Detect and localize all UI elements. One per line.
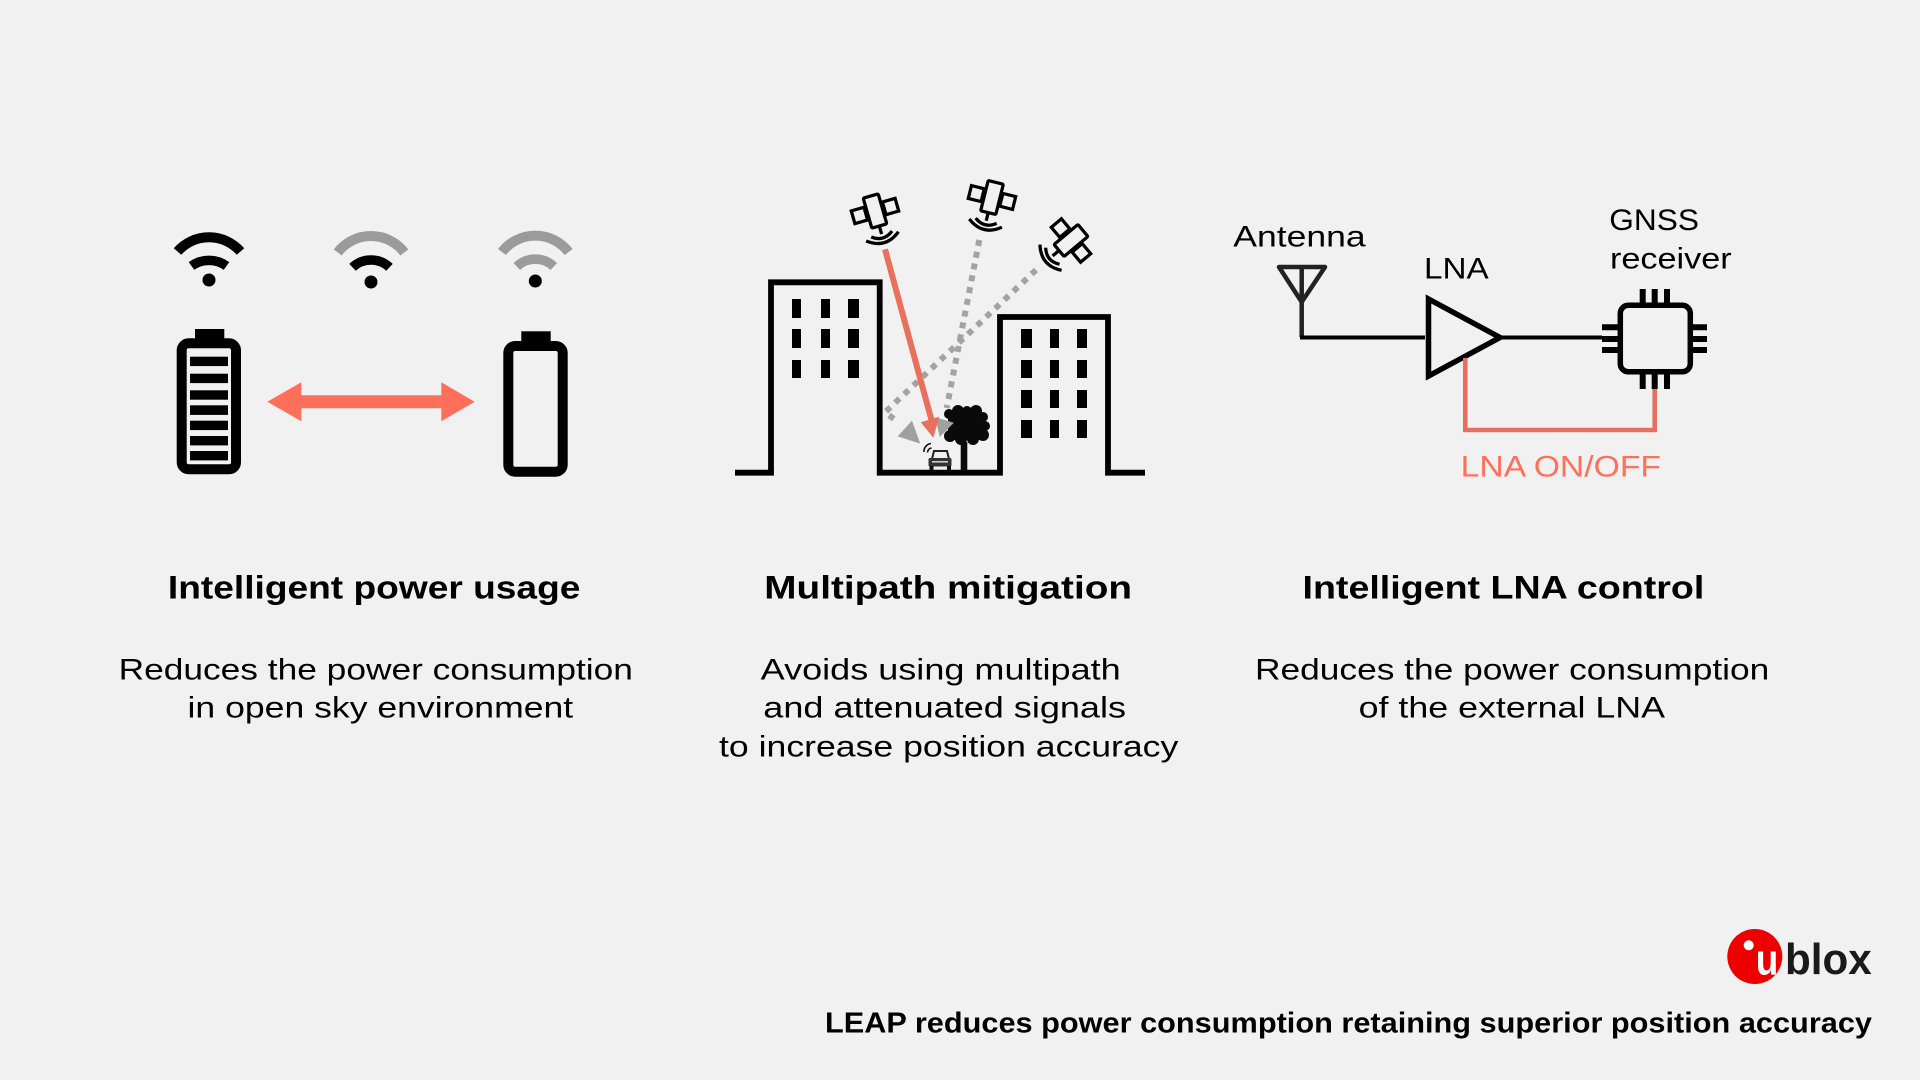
label: GNSS receiver	[1609, 204, 1732, 275]
icon: satellite right	[1031, 213, 1098, 279]
icon: low signal wifi	[502, 236, 569, 288]
text block: multipath description: Avoids using multipath	[761, 653, 1121, 686]
arrowhead: direct signal	[921, 417, 939, 438]
text block: multipath description: to increase position accuracy	[719, 731, 1178, 764]
logo: u-blox	[1727, 929, 1872, 984]
icon: empty battery	[508, 331, 563, 472]
heading: multipath mitigation: Multipath mitigation	[764, 569, 1132, 605]
text block: power usage description: Reduces the power consumption	[119, 653, 633, 686]
text block: LNA description: Reduces the power consumption	[1255, 653, 1769, 686]
footer caption: LEAP reduces power consumption retaining superior position accuracy	[825, 1007, 1872, 1039]
text block: multipath description	[719, 653, 1178, 764]
red control line	[1465, 358, 1655, 430]
text block: power usage description	[119, 653, 633, 724]
panel: intelligent LNA control	[1233, 204, 1769, 724]
icon: car with receiver	[924, 444, 952, 470]
signal wires	[1300, 336, 1602, 340]
icon: amplifier triangle	[1428, 299, 1500, 376]
label: LNA ON/OFF: LNA ON/OFF	[1461, 451, 1661, 484]
left building windows	[792, 299, 859, 378]
arrowhead: multipath signal	[899, 422, 919, 442]
text block: power usage description: in open sky environment	[188, 691, 574, 724]
icon: full battery	[182, 329, 236, 469]
text block: multipath description: and attenuated signals	[763, 691, 1126, 724]
text block: LNA description: of the external LNA	[1359, 691, 1665, 724]
red direct signal line	[885, 249, 933, 427]
text block: LNA description	[1255, 653, 1769, 724]
buildings outline	[735, 282, 1145, 473]
icon: satellite left	[849, 190, 906, 249]
icon: GNSS receiver chip	[1602, 289, 1707, 389]
right building windows	[1021, 329, 1087, 438]
label: GNSS receiver: GNSS	[1609, 204, 1699, 237]
icon: tree	[944, 405, 990, 471]
icon: full signal wifi	[178, 237, 240, 286]
arrow: double-headed coral	[267, 382, 475, 421]
icon: satellite centre	[962, 177, 1018, 235]
label: antenna: Antenna	[1233, 221, 1366, 254]
icon: antenna symbol	[1279, 267, 1325, 337]
dotted line: attenuated signal	[947, 240, 979, 408]
arrowhead: attenuated signal	[936, 418, 953, 436]
icon: medium signal wifi	[338, 236, 404, 288]
dotted line: reflected multipath signal	[885, 270, 1036, 422]
label: LNA: LNA	[1424, 253, 1489, 286]
logo: u-blox: blox	[1785, 935, 1872, 984]
label: GNSS receiver: receiver	[1610, 242, 1732, 275]
heading: intelligent power usage: Intelligent power usage	[168, 569, 580, 605]
panel: multipath mitigation	[719, 177, 1178, 764]
panel: intelligent power usage	[119, 236, 633, 724]
heading: intelligent LNA control: Intelligent LNA control	[1302, 569, 1704, 605]
logo: u-blox: u	[1756, 936, 1778, 984]
